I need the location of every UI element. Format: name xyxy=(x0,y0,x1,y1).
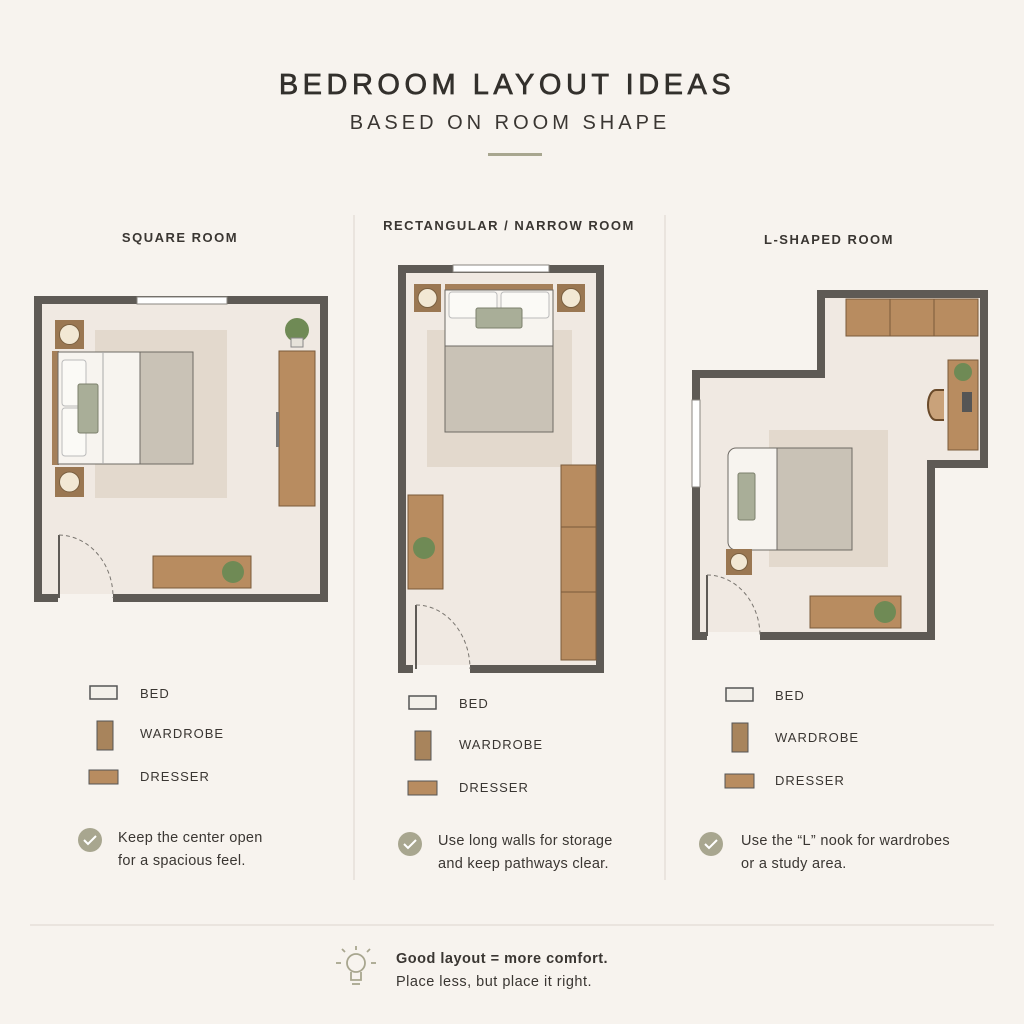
legend: rectangular room: DRESSER xyxy=(459,780,529,795)
panel: square room xyxy=(38,230,324,869)
subtitle: BASED ON ROOM SHAPE xyxy=(350,112,670,134)
tip: L-shaped room: Use the “L” nook for wardrobes xyxy=(741,833,950,849)
tip: square room: for a spacious feel. xyxy=(118,853,246,869)
legend: square room xyxy=(89,686,224,784)
panel: L-shaped room xyxy=(692,232,984,872)
legend: rectangular room: BED xyxy=(459,696,489,711)
legend: square room: WARDROBE xyxy=(140,726,224,741)
heading: square room: SQUARE ROOM xyxy=(122,230,238,245)
heading: L-shaped room: L-SHAPED ROOM xyxy=(764,232,894,247)
footer: Place less, but place it right. xyxy=(396,974,592,990)
floor plan: L-shaped room xyxy=(692,294,984,636)
legend: L-shaped room: BED xyxy=(775,688,805,703)
tip: rectangular room xyxy=(398,832,613,872)
panel: rectangular room xyxy=(383,218,635,872)
title: BEDROOM LAYOUT IDEAS xyxy=(279,69,735,101)
tip: rectangular room: and keep pathways clear. xyxy=(438,856,609,872)
tip: rectangular room: Use long walls for storage xyxy=(438,833,613,849)
legend: L-shaped room xyxy=(725,688,859,788)
tip: square room: Keep the center open xyxy=(118,830,263,846)
tip: L-shaped room xyxy=(699,832,950,872)
legend: L-shaped room: WARDROBE xyxy=(775,730,859,745)
floor plan: rectangular room xyxy=(402,265,600,669)
legend: square room: BED xyxy=(140,686,170,701)
icon: light bulb xyxy=(336,946,376,984)
footer xyxy=(336,946,608,990)
legend: rectangular room: WARDROBE xyxy=(459,737,543,752)
tip: square room xyxy=(78,828,263,869)
footer text: Good layout = more comfort. xyxy=(396,951,608,967)
heading: rectangular room: RECTANGULAR / NARROW ROOM xyxy=(383,218,635,233)
floor plan: square room xyxy=(38,297,324,598)
legend: L-shaped room: DRESSER xyxy=(775,773,845,788)
tip: L-shaped room: or a study area. xyxy=(741,856,847,872)
legend: square room: DRESSER xyxy=(140,769,210,784)
legend: rectangular room xyxy=(408,696,543,795)
